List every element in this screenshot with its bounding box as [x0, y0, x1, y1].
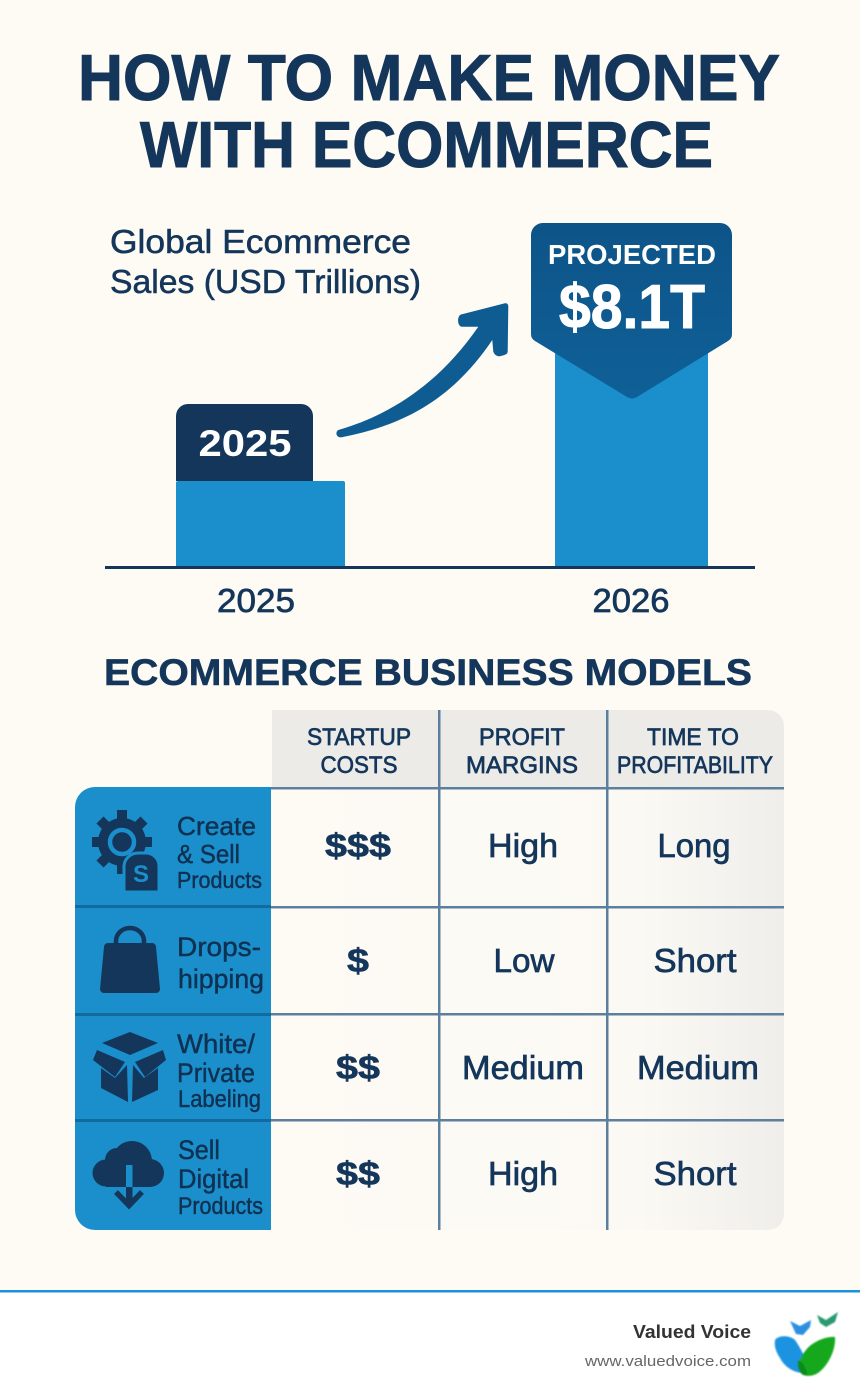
row: create and sell products: $$$ — [325, 827, 391, 864]
row: sell digital products: Sell — [178, 1135, 220, 1165]
row: create and sell products: & Sell — [177, 839, 240, 869]
chart subtitle — [110, 223, 421, 300]
icon: shopping bag — [100, 928, 160, 993]
row: white or private labeling: Medium — [637, 1049, 759, 1086]
row: dropshipping: Short — [654, 942, 736, 979]
row: sell digital products: Products — [178, 1193, 263, 1220]
row: white or private labeling — [93, 1029, 759, 1113]
arrow: growth — [336, 303, 508, 437]
icon: cloud download — [92, 1141, 164, 1206]
row: create and sell products: Create — [177, 811, 256, 841]
bar: 2025 — [176, 481, 345, 568]
table header: PROFIT — [479, 724, 565, 751]
axis label: 2025: 2025 — [217, 582, 295, 619]
bar: 2026 — [555, 340, 708, 568]
badge: 2025: 2025 — [198, 423, 292, 464]
row: sell digital products: Short — [654, 1155, 736, 1192]
row: create and sell products — [92, 810, 730, 893]
icon: gear with price tag: S — [133, 861, 149, 888]
table header: MARGINS — [466, 752, 578, 779]
table header — [272, 710, 784, 787]
row: create and sell products: Products — [177, 867, 262, 893]
icon: gear with price tag — [92, 810, 159, 892]
row: dropshipping: Drops- — [177, 932, 261, 962]
row: sell digital products — [92, 1135, 736, 1220]
row: dropshipping: Low — [494, 942, 555, 979]
table header: STARTUP — [307, 724, 411, 751]
panel: models column — [75, 787, 271, 1230]
table header: TIME TO — [647, 724, 739, 751]
chart subtitle: Sales (USD Trillions) — [110, 263, 421, 300]
logo — [775, 1312, 838, 1376]
row: white or private labeling: Private — [177, 1058, 255, 1088]
bar chart — [105, 223, 755, 619]
section heading: ECOMMERCE BUSINESS MODELS — [104, 652, 752, 693]
brand name: Valued Voice — [633, 1322, 751, 1342]
title: HOW TO MAKE MONEY — [78, 41, 780, 114]
row: white or private labeling: Medium — [462, 1049, 584, 1086]
table header: COSTS — [320, 752, 398, 779]
footer — [0, 1290, 860, 1399]
badge: projected: $8.1T — [559, 273, 705, 342]
chart subtitle: Global Ecommerce — [110, 223, 411, 260]
table body — [271, 787, 784, 1230]
row: create and sell products: High — [488, 827, 558, 864]
badge: projected — [531, 223, 732, 398]
badge: 2025 — [176, 404, 313, 481]
row: dropshipping: $ — [347, 942, 369, 979]
row: dropshipping — [100, 928, 736, 994]
row: sell digital products: High — [488, 1155, 558, 1192]
row: white or private labeling: $$ — [336, 1049, 380, 1086]
row: sell digital products: Digital — [178, 1164, 249, 1194]
row: dropshipping: hipping — [178, 964, 264, 994]
baseline — [105, 566, 755, 569]
title: WITH ECOMMERCE — [140, 108, 713, 181]
row: white or private labeling: Labeling — [178, 1086, 261, 1113]
website: www.valuedvoice.com — [584, 1353, 751, 1370]
axis label: 2026: 2026 — [592, 582, 670, 619]
row: create and sell products: Long — [658, 827, 730, 864]
badge: projected: PROJECTED — [548, 239, 716, 270]
title — [78, 41, 780, 181]
table: business models — [75, 710, 784, 1230]
icon: open box — [93, 1032, 166, 1102]
row: sell digital products: $$ — [336, 1155, 380, 1192]
row: white or private labeling: White/ — [177, 1029, 255, 1059]
table header: PROFITABILITY — [617, 752, 773, 779]
